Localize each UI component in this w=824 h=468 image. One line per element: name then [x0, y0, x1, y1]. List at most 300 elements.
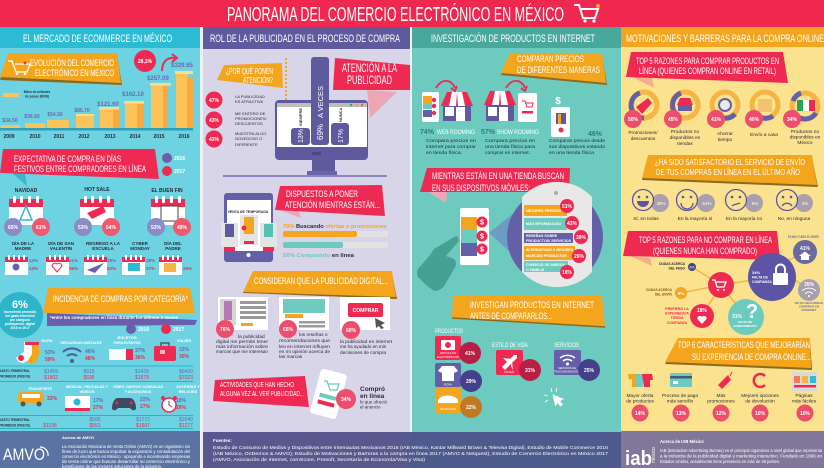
table: gasto trimestral fila 2: $1277 [179, 423, 193, 429]
calendars: otras fechas: 25% [183, 266, 192, 271]
icon: tableta: VENTA DE TEMPORADA [228, 210, 269, 214]
table: gasto trimestral fila 1: $615 [83, 369, 95, 375]
legend: categorías: 2017 [173, 327, 184, 333]
diagram: barreras de compra: PREFIERO LA [665, 307, 689, 311]
chart: monitor con barras: 69% [316, 124, 325, 140]
chart: características: Mayor oferta [627, 393, 654, 399]
diagram: barreras de compra: 34% [752, 270, 760, 275]
panel: rol de la publicidad [203, 27, 410, 420]
card: comprar: decisiones de compra [340, 350, 386, 356]
chart: características: Mejores opciones [741, 393, 779, 399]
chart: categorías fila 1: 37% [135, 348, 146, 354]
panel: mercado de ecommerce [0, 27, 200, 468]
heading: rol: ROL DE LA PUBLICIDAD EN EL PROCESO DE COMPRA [210, 33, 400, 45]
chart: categorías fila 2: 33% [47, 396, 58, 402]
heading: mercado [0, 27, 200, 48]
bar chart: evolución: $36.50 [24, 114, 40, 120]
calendar: navidad: 61% [36, 225, 47, 231]
illustration: teléfono y búsquedas: ALTERNATIVAS O MEJORES [526, 248, 574, 252]
chart: características [626, 372, 817, 422]
table: gasto trimestral fila 2: $1198 [43, 423, 57, 429]
chart: categorías fila 1 [16, 335, 191, 364]
banner: expectativa: FESTIVOS ENTRE COMPRADORES EN LÍNEA [14, 164, 146, 174]
banner: atención a la publicidad: PUBLICIDAD [347, 73, 392, 87]
bar chart: evolución: 2015 [153, 134, 165, 140]
chart: características: 10% [755, 411, 766, 417]
table: gasto trimestral fila 2: $595 [89, 417, 101, 423]
text: compró en línea: el anuncio [360, 404, 381, 410]
chart: satisfacción con caras: No, en ninguna [778, 216, 811, 222]
stats: rooming: Compara precios en [485, 138, 535, 144]
calendars: otras fechas: DÍA DE LA [12, 239, 35, 246]
bar chart: buscando y comprando [283, 224, 388, 259]
stats: rooming: 74% [420, 129, 435, 136]
bar chart: evolución: 2016 [178, 134, 190, 140]
calendars: otras fechas: VALENTÍN [50, 244, 72, 251]
calendars: otras fechas [5, 239, 192, 275]
banner: dispuestos: DISPUESTOS A PONER [286, 189, 358, 199]
footer: fuentes: Estudio de Consumo de Medios y Dispositivos entre Internautas Mexicanos 2016 (IAB México, Kantar Millward Brown & Televisa Digital), Estudio de Mobile Commerce 2016 [213, 445, 608, 451]
banner: evolución: EVOLUCIÓN DEL COMERCIO [30, 58, 114, 68]
card: reseñas: 65% [283, 327, 294, 333]
chart: satisfacción con caras: 2% [802, 201, 808, 206]
table: gasto trimestral fila 1: $1459 [44, 369, 58, 375]
legend: miles de millones: Miles de millones [24, 90, 50, 94]
banner: top 6 características [665, 338, 812, 370]
list: razones de atención: ME ENTERO DE [235, 111, 266, 116]
chart: características: 12% [716, 411, 727, 417]
chart: donas de razones [624, 92, 821, 147]
table: gasto trimestral fila 1: GASTO TRIMESTRAL [0, 368, 30, 373]
chart: categorías fila 1: 35% [179, 354, 190, 360]
chart: características: más fáciles [792, 398, 817, 404]
illustration: teléfono y búsquedas: 39% [576, 235, 587, 241]
chart: donas de razones: tiempo [718, 137, 733, 143]
banner: por qué ponen atención: ¿POR QUÉ PONEN [226, 67, 273, 76]
icon: teléfono comprando: 34% [341, 397, 352, 403]
badge: 6%: por categoría [10, 318, 30, 322]
badge: 6%: del gasto trimestral [5, 314, 35, 318]
legend: categorías: 2016 [138, 327, 149, 333]
banner: comparan precios: COMPARAN PRECIOS [517, 54, 584, 64]
diagram: barreras de compra: 6% [689, 266, 695, 270]
calendars: otras fechas: MONDAY [130, 246, 150, 251]
chart: donas de razones: Ahorrar [717, 131, 733, 137]
legend: miles de millones: de pesos (MXN) [25, 94, 49, 98]
footer: iab [621, 431, 824, 468]
badge: 6%: incremento promedio [4, 310, 36, 314]
stats: rooming: Compara precios en [426, 138, 476, 144]
chart: categorías fila 1: DESCARGAS DIGITALES [60, 340, 102, 345]
chart: donas de razones: 34% [787, 117, 798, 123]
list: razones de atención: NOVEDOSO O [235, 136, 262, 141]
footer: iab: Estados Unidos, actualmente tiene presencia en más de 45 países. [660, 459, 780, 464]
chart: categorías fila 2: 17% [93, 398, 104, 404]
illustration: teléfono y búsquedas: O FAMILIA [526, 268, 545, 272]
diagram: barreras de compra: TIENDA [670, 316, 684, 320]
illustration: teléfono y búsquedas: MARCAS/ PRODUCTOS [526, 254, 567, 258]
footer: fuentes: (AMVO, Asociación de Internet, comScore, Prosoft, Secretaría de Economía/Visa y Visa) [213, 457, 425, 463]
bar chart: evolución: $121.60 [97, 102, 120, 108]
chart: donas de razones: 50% [628, 117, 639, 123]
chart: características: 10% [800, 411, 811, 417]
chart: estilo de vida [492, 342, 541, 381]
heading: investigación: INVESTIGACIÓN DE PRODUCTOS EN INTERNET [431, 32, 595, 45]
badge: 6%: 6% [12, 299, 28, 311]
banner: investigan productos [452, 296, 605, 327]
chart: monitor con barras [223, 57, 387, 177]
calendars: otras fechas: DÍA DEL [164, 239, 182, 246]
calendar: hot sale: 54% [106, 225, 117, 231]
calendar: navidad [4, 188, 50, 236]
diagram: barreras de compra: DUDAS ACERCA [646, 288, 673, 292]
bar chart: buscando y comprando: 56% Comprando en línea [283, 253, 354, 259]
footer: fuentes [203, 432, 621, 468]
calendars: otras fechas: 27% [146, 266, 155, 271]
banner: comparan precios: DE DIFERENTES MANERAS [517, 65, 600, 75]
illustration: teléfono y búsquedas: PRODUCTOS/ SERVICIOS [526, 239, 572, 243]
stats: rooming [420, 129, 605, 156]
bar chart: evolución: $329.85 [171, 63, 194, 69]
bar chart: evolución: 2012 [78, 134, 90, 140]
stats: rooming: comprar en internet. [485, 150, 530, 156]
illustration: teléfono y búsquedas: 43% [567, 221, 578, 227]
bar chart: evolución: $257.09 [147, 76, 170, 82]
footer: fuentes: Fuentes: [213, 438, 232, 443]
diagram: barreras de compra: EXPERIENCIA [665, 312, 689, 316]
card: reseñas [279, 297, 330, 360]
table: gasto trimestral fila 1: $536 [83, 375, 95, 381]
chart: características: de devolución [745, 398, 775, 404]
banner: comparan precios [501, 53, 607, 85]
chart: donas de razones: 41% [711, 117, 722, 123]
bar chart: evolución: 2013 [104, 134, 116, 140]
banner: razones para no comprar: (QUIENES NUNCA HAN COMPRADO) [653, 246, 757, 256]
card: comprar [340, 297, 393, 356]
text: compró en línea: lo que ofreció [360, 400, 388, 404]
card: reseñas: las marcas [279, 354, 303, 360]
chart: satisfacción con caras: 38% [656, 201, 666, 206]
calendars: otras fechas: CYBER [132, 241, 149, 246]
banner: atención a la publicidad [333, 58, 410, 118]
chart: categorías fila 1: 46% [85, 349, 96, 355]
legend: años [162, 153, 185, 176]
card: reseñas: los reseñas o [299, 332, 328, 338]
diagram: barreras de compra: 31% [732, 314, 743, 320]
legend: miles de millones [2, 90, 50, 98]
chart: categorías fila 2: VIDEO JUEGOS CONSOLAS [113, 384, 163, 389]
title bar: PANORAMA DEL COMERCIO ELECTRÓNICO EN MÉXICO [227, 3, 564, 26]
calendar: hot sale [74, 187, 120, 236]
legend: años: 2016 [174, 156, 185, 162]
chart: características: de productos [626, 398, 654, 404]
calendars: otras fechas: 38% [146, 258, 155, 263]
chart: satisfacción con caras: 6% [752, 201, 758, 206]
chart: categorías fila 2: Y ACCESORIOS [125, 389, 151, 394]
footer: amvo: fines de lucro que busca impulsar la expansión y consolidación del [62, 449, 190, 455]
chart: categorías fila 1: 48% [85, 356, 96, 362]
card: más información: marcas que me interesan [216, 349, 268, 355]
calendars: otras fechas: 41% [69, 258, 78, 263]
list: razones de atención: 43% [209, 118, 220, 124]
diagram: barreras de compra: CONFIANZA [667, 321, 688, 325]
footer: iab: a la industria de la publicidad digital y marketing interactivo. Fundado en 1996 en [660, 454, 822, 458]
chart: características: 14% [635, 411, 646, 417]
banner: consideran [243, 271, 397, 299]
banner: evolución: ELECTRÓNICO EN MÉXICO [35, 68, 114, 78]
diagram: barreras de compra: 41% [800, 246, 811, 252]
diagram: barreras de compra: 35% [804, 282, 815, 288]
bar chart: evolución: 2011 [54, 134, 65, 140]
chart: categorías fila 1: PARA EVENTOS [114, 340, 141, 345]
banner: dispuestos [275, 185, 385, 218]
table: gasto trimestral fila 1: PROMEDIO (PESOS) [0, 374, 31, 378]
chart: categorías fila 2: RELOJES [179, 389, 198, 394]
calendars: otras fechas: 32% [107, 266, 116, 271]
stats: rooming: en una tienda física [549, 150, 594, 156]
legend: categorías [126, 324, 184, 334]
footer: amvo: AMVO [3, 445, 45, 464]
calendars: otras fechas: PADRE [165, 246, 181, 251]
legend: años: 2017 [174, 169, 185, 175]
badge: 6%: publiquecibl. digital [5, 322, 35, 326]
chart: satisfacción con caras [632, 190, 813, 222]
chart: características: más sencillo [667, 398, 694, 404]
stats: rooming: internet para comprar [426, 144, 476, 150]
banner: por qué ponen atención [217, 63, 283, 88]
card: más información: 76% [220, 327, 231, 333]
calendar: navidad: 65% [8, 225, 19, 231]
stats: rooming: sus dispositivos estando [549, 144, 605, 150]
table: gasto trimestral fila 2: $2040 [179, 417, 193, 423]
chart: servicios: TELECOMUNICACIÓN [554, 370, 580, 374]
bar chart: evolución: $85.70 [74, 108, 90, 114]
banner: dispuestos: ATENCIÓN MIENTRAS ESTÁN... [285, 200, 380, 210]
chart: categorías fila 2: 26% [176, 405, 187, 411]
bar chart: buscando y comprando: 70% Buscando ofertas o promociones [283, 224, 387, 230]
icon: precios en dispositivo: $ [555, 96, 561, 107]
footer: fuentes: (IAB México, OnDemos & AMVO), Estudio de Motivaciones y Barreras a la compra en línea 2017 (AMVO & Netquest), Estudio de Comercio Electrónico en México 2017 [213, 451, 608, 457]
card: comprar: me ha ayudado en mis [340, 344, 387, 350]
diagram: barreras de compra: DEL PAGO [669, 266, 686, 270]
chart: donas de razones: tiendas [677, 141, 693, 147]
chart: estilo de vida: VIAJES [504, 370, 514, 374]
chart: productos: VEHÍCULOS [440, 407, 456, 411]
bar chart: evolución: 2010 [29, 134, 41, 140]
diagram: barreras de compra: DUDAS ACERCA [659, 262, 686, 266]
calendar: el buen fin [147, 188, 191, 236]
card: comprar: 60% [346, 328, 357, 334]
chart: categorías fila 2: 22% [140, 397, 151, 403]
calendars: otras fechas: 43% [29, 266, 38, 271]
footer: iab: méxico [651, 447, 657, 463]
diagram: barreras de compra: ? [746, 301, 758, 323]
bar chart: evolución: 2009 [3, 134, 15, 140]
banner: satisfactorio [642, 155, 818, 187]
list: razones de atención: DESCUENTOS [235, 121, 263, 126]
banner: incidencia [43, 288, 197, 326]
diagram: barreras de compra: INTERNET [802, 308, 817, 312]
list: razones de atención: PROMOCIONES/ [235, 116, 267, 121]
chart: estilo de vida: 31% [525, 368, 536, 374]
chart: categorías fila 2: JOYERÍAS Y [176, 384, 200, 389]
table: gasto trimestral fila 2: $551 [89, 423, 101, 429]
calendar: hot sale: HOT SALE [84, 187, 110, 193]
chart: categorías fila 1: BOLETOS [117, 335, 137, 340]
calendars: otras fechas: DÍA DE SAN [48, 239, 74, 246]
card: más información: digital me permite tener [216, 339, 268, 345]
card: reseñas: en mi opinión acerca de [279, 349, 330, 355]
chart: características: Páginas [795, 393, 813, 399]
banner: actividades: ACTIVIDADES QUE HAN HECHO [220, 380, 294, 389]
chart: donas de razones: 45% [668, 117, 679, 123]
card: más información: la publicidad [238, 334, 265, 340]
illustration: teléfono y búsquedas: 18% [562, 270, 573, 276]
banner: top 5 razones [626, 52, 788, 88]
chart: servicios: SERVICIOS [554, 342, 579, 349]
chart: monitor con barras: 17% [338, 129, 345, 143]
list: razones de atención: ES ATRACTIVA [235, 99, 263, 104]
card: reseñas: recomendaciones que [279, 338, 330, 344]
chart: satisfacción con caras: 54% [702, 201, 712, 206]
calendars: otras fechas: ESCUELA [92, 246, 114, 251]
calendars: otras fechas: MADRE [15, 246, 31, 251]
table: gasto trimestral fila 1: $1439 [135, 369, 149, 375]
chart: categorías fila 1: VIAJES [177, 338, 191, 343]
calendar: navidad: NAVIDAD [15, 188, 38, 194]
chart: categorías fila 1: 36% [135, 355, 146, 361]
chart: productos: ROPA [444, 382, 452, 386]
banner: mientras están: MIENTRAS ESTÁN EN UNA TIENDA BUSCAN [432, 171, 564, 181]
stats: rooming: WEB ROOMING [437, 129, 475, 136]
diagram: barreras de compra: CONOCIMIENTO [733, 324, 757, 328]
illustration: teléfono y búsquedas: MEJORES PRECIOS [526, 209, 561, 213]
diagram: barreras de compra: NO DA SEGURIDAD [795, 301, 824, 305]
illustration: teléfono y búsquedas: CONSEJO DE AMIGOS [526, 263, 566, 267]
illustration: teléfono y búsquedas: $ [480, 220, 484, 226]
list: razones de atención: MUESTRA ALGO [235, 131, 266, 136]
card: comprar: la publicidad en internet [340, 339, 393, 345]
table: gasto trimestral fila 2 [0, 415, 193, 429]
list: razones de atención: LA PUBLICIDAD [235, 94, 265, 99]
title bar [0, 0, 824, 27]
banner: incidencia: *entre los compradores en línea durante los últimos 3 meses [50, 315, 178, 320]
chart: categorías fila 2 [18, 384, 200, 412]
banner: actividades: ALGUNA VEZ AL VER PUBLICIDAD... [220, 389, 304, 398]
heading: rol [203, 27, 410, 49]
bar chart: evolución: $162.10 [122, 92, 144, 98]
heading: motivaciones [621, 27, 824, 47]
diagram: barreras de compra: DEL ENVÍO [655, 292, 673, 296]
banner: razones para no comprar [623, 231, 780, 266]
banner: evolución [0, 53, 122, 85]
banner: investigan productos: INVESTIGAN PRODUCTOS EN INTERNET [470, 300, 594, 310]
footer: amvo [0, 431, 200, 468]
chart: donas de razones: Productos no [671, 129, 699, 135]
icon: tableta [221, 193, 277, 262]
calendars: otras fechas: 36% [107, 258, 116, 263]
banner: por qué ponen atención: ATENCIÓN? [243, 76, 273, 85]
diagram: barreras de compra: FALTA DE [738, 320, 752, 324]
chart: productos [435, 328, 482, 418]
chart: monitor con barras: SIEMPRE [298, 108, 303, 126]
illustration: teléfono y búsquedas [417, 182, 603, 291]
chart: características: promociones [707, 398, 735, 404]
table: gasto trimestral fila 1: $1502 [44, 375, 58, 381]
chart: características: Más [716, 393, 726, 399]
chart: satisfacción con caras: En la mayoría no [726, 216, 762, 222]
calendar: el buen fin: EL BUEN FIN [151, 188, 183, 194]
calendars: otras fechas: 43% [29, 258, 38, 263]
text: compró en línea: Compró [360, 386, 385, 393]
footer: amvo: La Asociación Mexicana de Venta Online (AMVO) es un organismo sin [62, 444, 190, 450]
chart: donas de razones: Productos no [791, 129, 819, 135]
chart: monitor con barras: 13% [298, 129, 305, 143]
stats: rooming: 46% [588, 131, 603, 138]
calendar: hot sale: 53% [78, 225, 89, 231]
chart: productos: ARTÍCULOS [440, 351, 456, 355]
banner: investigan productos: ANTES DE COMPARARLOS... [470, 311, 552, 321]
chart: donas de razones: 40% [749, 117, 760, 123]
list: razones de atención: 43% [209, 137, 220, 143]
table: gasto trimestral fila 1 [0, 366, 193, 382]
table: gasto trimestral fila 2: GASTO TRIMESTRAL [0, 417, 30, 422]
calendars: otras fechas: REGRESO A LA [86, 241, 121, 246]
chart: categorías fila 2: TRANSPORTE [28, 386, 52, 391]
chart: servicios: 25% [584, 368, 595, 374]
list: razones de atención: DIFERENTE [235, 142, 258, 147]
badge: 6%: 2016 vs 2017 [10, 326, 30, 330]
badge: 28,3%: 28,3% [138, 59, 153, 65]
chart: categorías fila 2: 27% [140, 404, 151, 410]
chart: donas de razones: disponibles en [670, 135, 701, 141]
chart: categorías fila 2: 27% [93, 405, 104, 411]
illustration: teléfono y búsquedas: $ [480, 234, 484, 240]
chart: productos: PRODUCTOS [435, 328, 463, 335]
chart: productos: 29% [466, 379, 477, 385]
badge: 28,3% [134, 50, 156, 72]
chart: categorías fila 2: 18% [176, 398, 187, 404]
stats: rooming: SHOW ROOMING [497, 129, 539, 136]
chart: donas de razones: descuentos [631, 136, 656, 142]
chart: satisfacción con caras: Sí, en todas [633, 216, 659, 222]
diagram: barreras de compra: FALTA DE [752, 276, 769, 280]
chart: monitor con barras: A VECES [316, 86, 325, 118]
diagram: barreras de compra: 8% [678, 291, 684, 296]
table: gasto trimestral fila 2: PROMEDIO (PESOS) [0, 422, 31, 428]
icon: web rooming [422, 81, 473, 122]
banner: mientras están [420, 168, 570, 203]
chart: características: 13% [676, 411, 687, 417]
icon: show rooming [484, 81, 537, 122]
illustration: teléfono y búsquedas: $ [480, 246, 484, 254]
diagram: barreras de compra [646, 234, 824, 335]
chart: monitor con barras: NUNCA [338, 107, 343, 122]
banner: atención a la publicidad: ATENCIÓN A LA [342, 60, 397, 75]
table: gasto trimestral fila 1: $7023 [179, 375, 193, 381]
calendar: el buen fin: 53% [151, 225, 162, 231]
chart: categorías fila 1: 53% [45, 350, 56, 356]
panel: motivaciones y barreras [621, 27, 824, 468]
illustration: teléfono y búsquedas: 51% [562, 204, 573, 210]
table: gasto trimestral fila 1: $1579 [135, 375, 149, 381]
banner: expectativa: EXPECTATIVA DE COMPRA EN DÍAS [14, 154, 121, 164]
bar chart: evolución [0, 63, 194, 140]
banner: incidencia: INCIDENCIA DE COMPRAS POR CATEGORÍA* [53, 294, 188, 304]
footer: amvo: de venta online que buscan desarrollar su comercio electrónico y [62, 459, 191, 465]
icon: cursor [544, 388, 563, 406]
stats: rooming: una tienda física para [485, 144, 535, 150]
